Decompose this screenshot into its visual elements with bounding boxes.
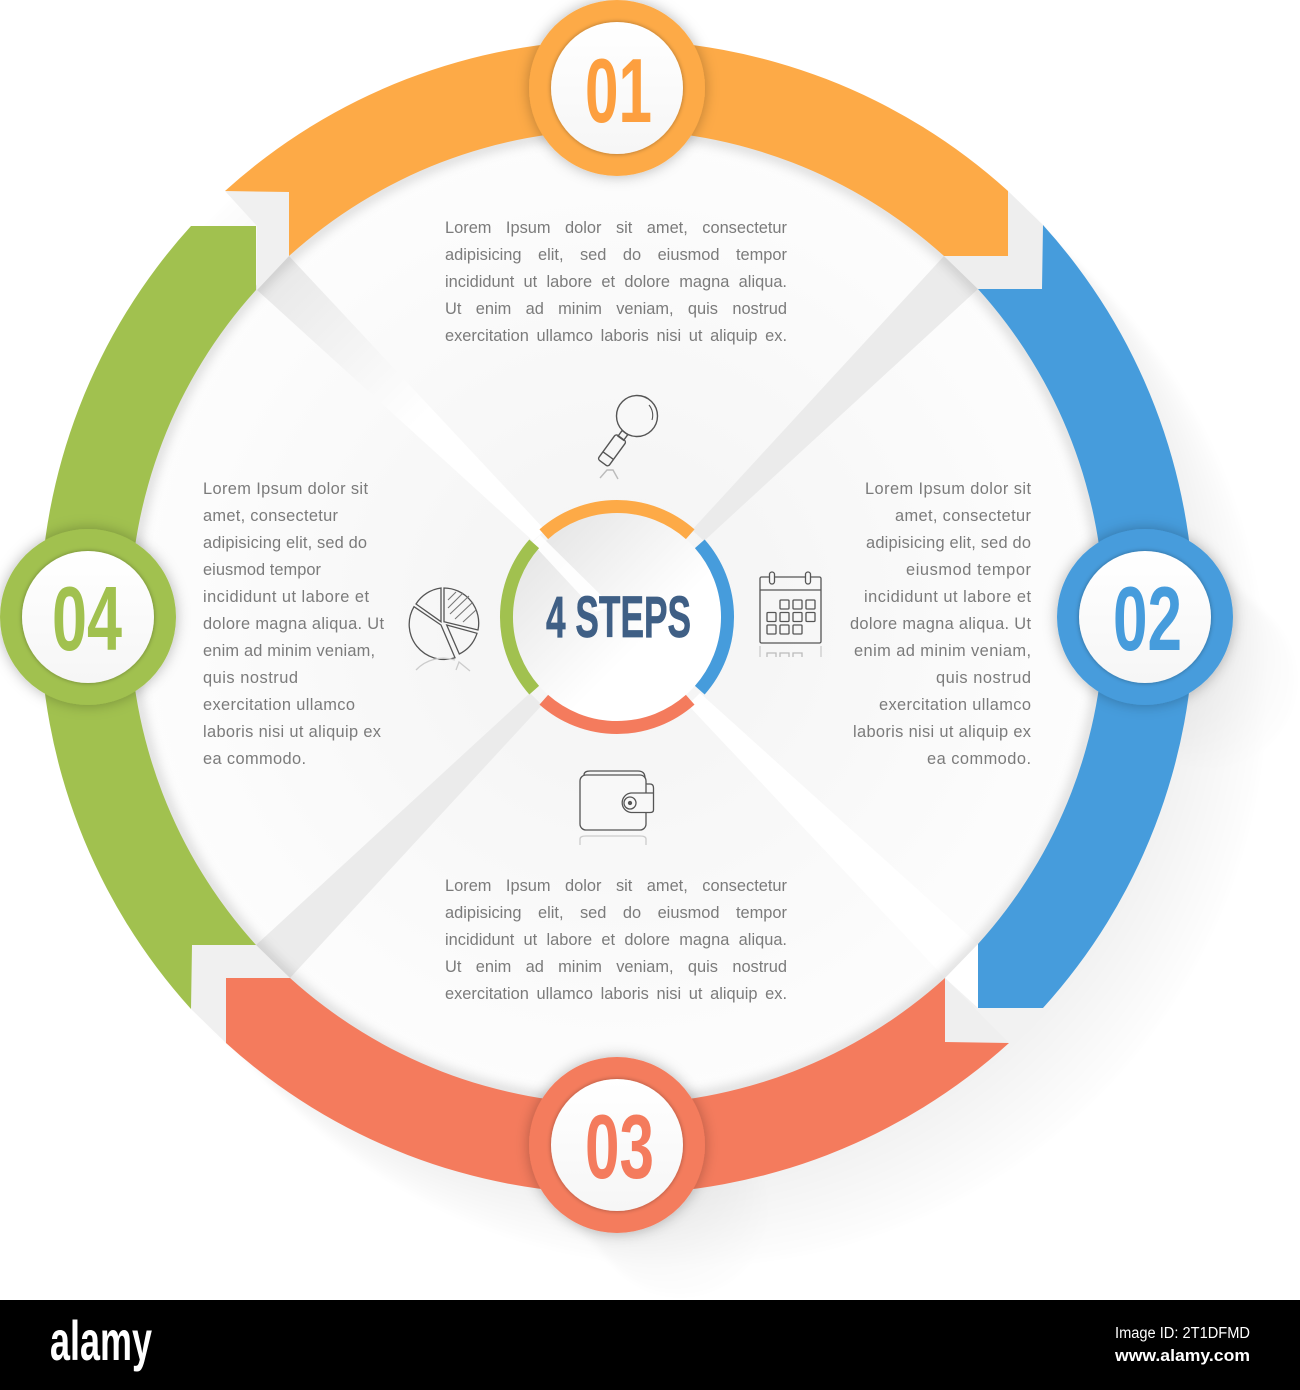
text block: step 2 description: amet, consectetur [895,507,1032,525]
fold: south-east notch [945,944,1009,1043]
text block: step 4 description: incididunt ut labore et [203,588,369,606]
band: step 2 blue arrow [978,225,1194,1008]
text block: step 1 description: Ut enim ad minim veniam, quis nostrud [445,300,787,318]
text block: step 4 description: Lorem Ipsum dolor sit [203,480,368,498]
text block: step 1 description [445,219,787,345]
text block: step 2 description: eiusmod tempor [906,561,1032,579]
icon: wallet [580,771,654,845]
fold: north-west notch [225,191,289,290]
badge: step 01 [529,0,705,176]
footer bar [0,1300,1300,1390]
text block: step 2 description: enim ad minim veniam, [854,642,1031,660]
band: step 3 red arrow [226,978,1009,1194]
text block: step 4 description: eiusmod tempor [203,561,322,579]
text block: step 3 description [445,877,787,1003]
text block: step 1 description: exercitation ullamco laboris nisi ut aliquip ex. [445,327,787,345]
text block: step 4 description: adipisicing elit, sed do [203,534,367,552]
text block: step 3 description: exercitation ullamco laboris nisi ut aliquip ex. [445,985,787,1003]
badge: step 02: 02 [1113,569,1182,670]
text block: step 4 description: dolore magna aliqua. Ut [203,615,384,633]
text block: step 2 description [850,480,1032,768]
fold: south-west notch [191,945,290,1043]
text block: step 2 description: laboris nisi ut aliquip ex [853,723,1032,741]
band: step 4 green arrow [40,226,256,1009]
badge: step 03 [529,1057,705,1233]
hub title: 4 STEPS [546,585,691,650]
text block: step 2 description: quis nostrud [936,669,1031,687]
text block: step 4 description: laboris nisi ut aliquip ex [203,723,382,741]
footer logo: alamy [50,1309,152,1372]
text block: step 4 description: enim ad minim veniam, [203,642,375,660]
text block: step 4 description: quis nostrud [203,669,298,687]
badge: step 04: 04 [52,569,122,670]
text block: step 4 description: exercitation ullamco [203,696,355,714]
text block: step 3 description: incididunt ut labore et dolore magna aliqua. [445,931,787,949]
footer site address: www.alamy.com [1114,1346,1250,1365]
footer image id: Image ID: 2T1DFMD [1115,1325,1250,1342]
text block: step 2 description: ea commodo. [927,750,1031,768]
fold: north-east notch [944,191,1043,289]
text block: step 4 description: amet, consectetur [203,507,339,525]
text block: step 3 description: Ut enim ad minim veniam, quis nostrud [445,958,787,976]
badge: step 04 [0,529,176,705]
badge: step 02 [1057,529,1233,705]
text block: step 4 description: ea commodo. [203,750,306,768]
panel: central disc with four quadrants [127,127,1107,1107]
text block: step 2 description: incididunt ut labore et [864,588,1031,606]
icon: calendar [760,572,821,657]
band: step 1 orange arrow [225,40,1008,256]
badge: step 01: 01 [585,41,652,142]
text block: step 3 description: adipisicing elit, sed do eiusmod tempor [445,904,787,922]
text block: step 2 description: dolore magna aliqua. Ut [850,615,1031,633]
icon: magnifying glass [598,396,658,479]
text block: step 1 description: incididunt ut labore et dolore magna aliqua. [445,273,787,291]
icon: pie chart [409,588,479,671]
center hub [506,506,728,728]
text block: step 2 description: Lorem Ipsum dolor sit [865,480,1031,498]
badge: step 03: 03 [585,1097,654,1198]
text block: step 4 description [203,480,384,768]
text block: step 1 description: adipisicing elit, sed do eiusmod tempor [445,246,787,264]
text block: step 1 description: Lorem Ipsum dolor sit amet, consectetur [445,219,787,237]
text block: step 3 description: Lorem Ipsum dolor sit amet, consectetur [445,877,787,895]
text block: step 2 description: exercitation ullamco [879,696,1031,714]
text block: step 2 description: adipisicing elit, sed do [866,534,1031,552]
